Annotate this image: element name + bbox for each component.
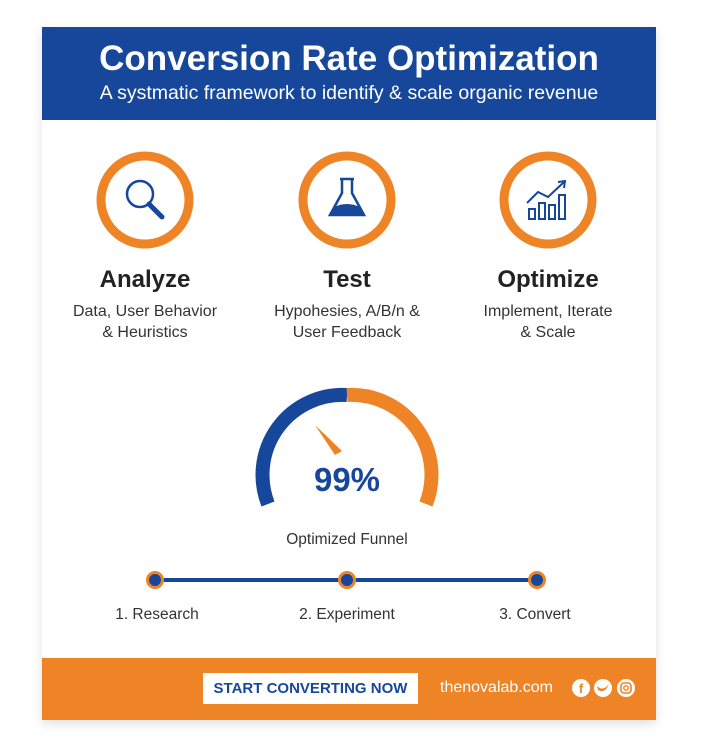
header	[42, 27, 656, 120]
gauge label: Optimized Funnel	[286, 531, 408, 548]
step: optimize	[484, 266, 612, 341]
footer	[42, 658, 656, 720]
icon: chart	[504, 156, 592, 244]
step: optimize: & Scale	[520, 324, 576, 341]
timeline	[148, 572, 544, 588]
social icons	[572, 679, 635, 697]
website: thenovalab.com	[440, 679, 553, 696]
step: optimize: Implement, Iterate	[484, 303, 612, 320]
icon: flask	[303, 156, 391, 244]
step: test	[274, 266, 420, 341]
step: analyze: Analyze	[100, 266, 190, 293]
gauge value: 99%	[314, 461, 380, 498]
title: Conversion Rate Optimization	[99, 39, 599, 78]
social icons: f	[579, 681, 584, 696]
button	[203, 673, 418, 704]
step: analyze: & Heuristics	[102, 324, 188, 341]
step: test: Hypohesies, A/B/n &	[274, 303, 420, 320]
card: 2. Experiment	[299, 606, 395, 623]
icon: magnifier	[101, 156, 189, 244]
subtitle: A systmatic framework to identify & scale organic revenue	[100, 82, 598, 104]
icons	[96, 152, 596, 589]
step: test: Test	[323, 266, 371, 293]
step: optimize: Optimize	[497, 266, 599, 293]
card: 3. Convert	[499, 606, 571, 623]
timeline labels: 1. Research	[115, 606, 199, 623]
step: analyze: Data, User Behavior	[73, 303, 217, 320]
button: START CONVERTING NOW	[214, 680, 407, 697]
step: test: User Feedback	[293, 324, 401, 341]
card	[42, 27, 656, 720]
step: analyze	[73, 266, 217, 341]
gauge	[263, 395, 431, 504]
